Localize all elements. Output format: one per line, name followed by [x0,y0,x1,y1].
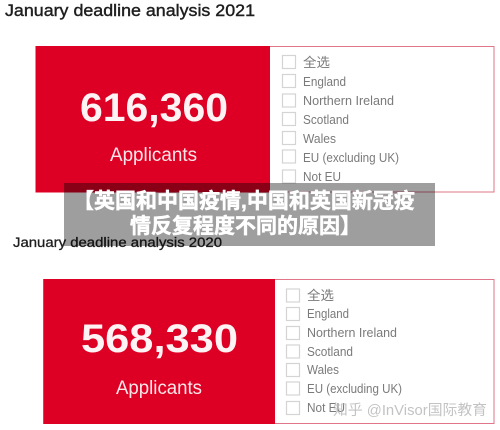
checklist 2021: Northern Ireland [303,93,394,108]
filter box outline 2020 [44,280,494,424]
applicants label 2021: Applicants [110,145,197,166]
title: 2020: January deadline analysis 2020 [13,235,222,250]
checklist 2020: EU (excluding UK) [307,381,402,396]
checklist 2020: England [307,306,349,321]
headline overlay [64,183,435,246]
headline text: 【英国和中国疫情,中国和英国新冠疫 [73,189,415,213]
checklist 2020: Scotland [307,344,353,359]
checklist 2020: Northern Ireland [307,325,397,340]
red card 2021 [36,46,270,192]
panel: 2021 applicants [36,46,494,192]
overlay band [64,183,435,246]
number 2021: 616,360 [80,86,228,130]
checklist 2021: England [303,74,346,89]
number 2020: 568,330 [81,317,238,361]
checklist 2021 [282,55,399,184]
title: 2021: January deadline analysis 2021 [5,2,255,20]
checklist 2021: Wales [303,131,336,146]
filter box outline 2021 [36,46,494,192]
panel: 2020 applicants [44,279,494,424]
checklist 2021: 全选 [303,55,330,70]
checklist 2021: Not EU [303,169,341,184]
applicants label 2020: Applicants [116,378,202,399]
checklist 2021: Scotland [303,112,349,127]
checklist 2020: 全选 [307,288,334,303]
checklist 2020: Wales [307,362,339,377]
red card 2020 [44,279,275,424]
checklist 2021: EU (excluding UK) [303,150,399,165]
watermark: 知乎 @InVisor国际教育 [333,402,487,419]
checklist 2020 [286,288,402,415]
headline overlay: 情反复程度不同的原因】 [130,215,361,238]
checklist 2020: Not EU [307,400,345,415]
